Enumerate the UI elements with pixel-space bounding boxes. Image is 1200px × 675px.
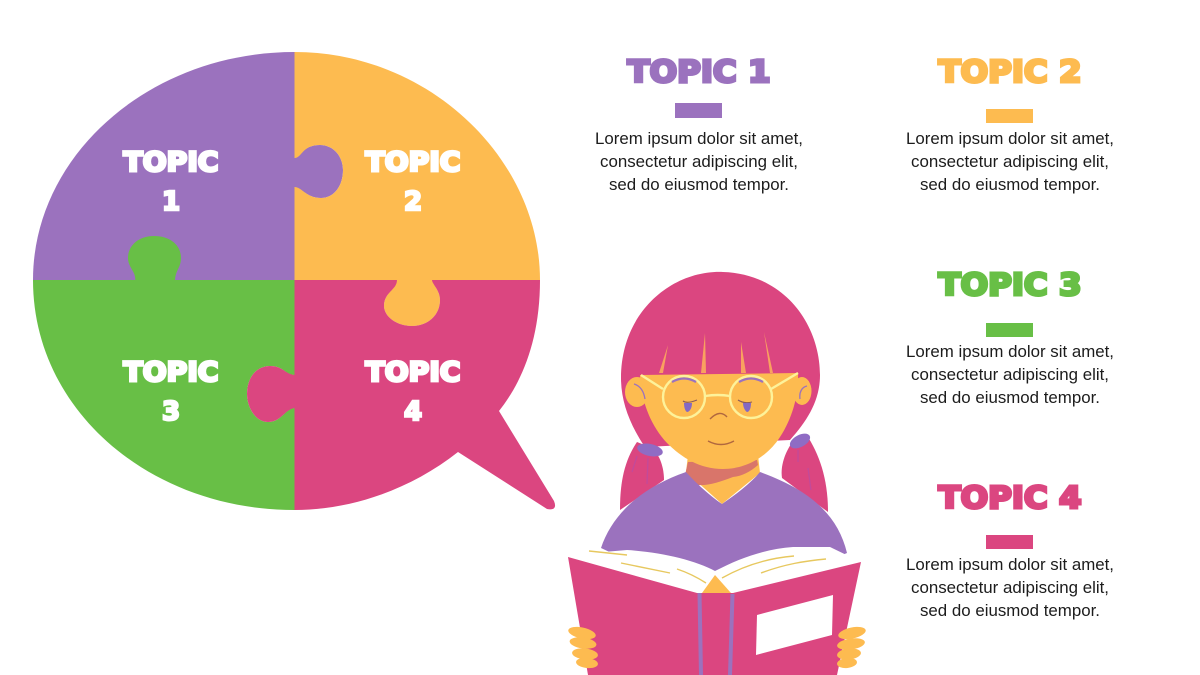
piece: topic 2 yellow <box>294 52 540 326</box>
eyebrows <box>672 378 763 382</box>
bubble label: topic 4: 4 <box>404 397 422 427</box>
left pigtail <box>620 442 664 510</box>
bubble label: topic 1: 1 <box>162 187 180 217</box>
text block: topic 1: sed do eiusmod tempor. <box>609 175 789 194</box>
bubble label: topic 3 <box>124 357 218 427</box>
bangs highlights <box>659 332 773 373</box>
ears <box>625 377 812 407</box>
bubble label: topic 2: TOPIC <box>366 147 460 178</box>
bubble label: topic 1: TOPIC <box>124 147 218 178</box>
text block: topic 1 <box>595 55 803 194</box>
piece: topic 4 pink with tail <box>247 280 555 510</box>
eyes <box>683 400 752 412</box>
spine lines <box>700 593 732 675</box>
text block: topic 3: sed do eiusmod tempor. <box>920 388 1100 407</box>
text block: topic 4 <box>906 481 1114 620</box>
illustration: girl reading a book <box>567 272 867 675</box>
text block: topic 3: TOPIC 3 <box>938 268 1082 303</box>
text block: topic 3: consectetur adipiscing elit, <box>911 365 1109 384</box>
book pages <box>568 547 861 594</box>
bubble label: topic 2: 2 <box>404 187 422 217</box>
face <box>640 373 798 469</box>
bubble label: topic 2 <box>366 147 460 217</box>
text block: topic 4: Lorem ipsum dolor sit amet, <box>906 555 1114 574</box>
text block: topic 4: TOPIC 4 <box>938 481 1082 516</box>
bubble label: topic 4 <box>366 357 460 427</box>
bubble label: topic 4: TOPIC <box>366 357 460 388</box>
glasses <box>641 373 798 418</box>
shirt <box>601 472 847 605</box>
bubble label: topic 3: 3 <box>162 397 180 427</box>
text block: topic 1: consectetur adipiscing elit, <box>600 152 798 171</box>
text block: topic 4: consectetur adipiscing elit, <box>911 578 1109 597</box>
page text lines <box>589 551 826 583</box>
book cover <box>568 557 861 675</box>
bubble label: topic 3: TOPIC <box>124 357 218 388</box>
text block: topic 2: TOPIC 2 <box>938 55 1082 90</box>
piece: topic 1 purple <box>33 52 343 280</box>
left hand <box>567 625 599 669</box>
speech bubble puzzle <box>33 52 555 510</box>
text block: topic 1: Lorem ipsum dolor sit amet, <box>595 129 803 148</box>
bubble label: topic 1 <box>124 147 218 217</box>
book label <box>756 595 833 655</box>
text block: topic 2: consectetur adipiscing elit, <box>911 152 1109 171</box>
hair <box>621 272 820 447</box>
hair ties <box>636 431 813 459</box>
ear details <box>634 384 807 399</box>
book spine triangle <box>702 575 731 593</box>
text block: topic 2: Lorem ipsum dolor sit amet, <box>906 129 1114 148</box>
neck <box>686 455 760 504</box>
piece: topic 3 green <box>33 236 294 510</box>
pigtail strands <box>632 450 811 490</box>
right hand <box>836 625 867 669</box>
text block: topic 3: Lorem ipsum dolor sit amet, <box>906 342 1114 361</box>
text block: topic 1: TOPIC 1 <box>628 55 770 90</box>
text block: topic 3 <box>906 268 1114 407</box>
right pigtail <box>782 434 828 512</box>
text block: topic 2: sed do eiusmod tempor. <box>920 175 1100 194</box>
neck shadow <box>685 460 758 485</box>
text block: topic 4: sed do eiusmod tempor. <box>920 601 1100 620</box>
nose and mouth <box>708 413 734 444</box>
text block: topic 2 <box>906 55 1114 194</box>
